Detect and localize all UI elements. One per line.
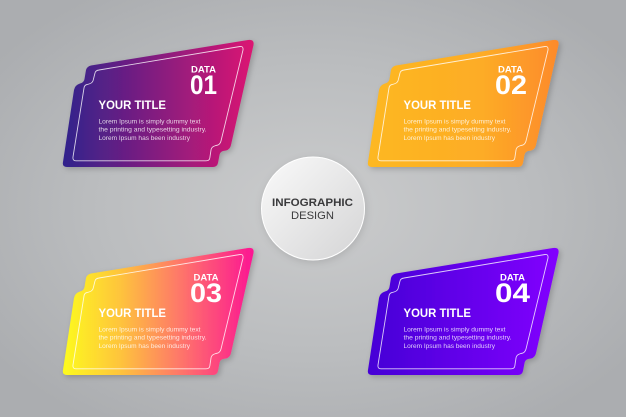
inner outline 03 — [73, 254, 243, 369]
body text 02: Lorem Ipsum has been industry — [404, 136, 495, 142]
body text 03: Lorem Ipsum is simply dummy text — [98, 327, 201, 333]
data label 03: DATA — [194, 272, 219, 282]
data label 01: DATA — [191, 64, 216, 74]
panel: data 02 — [368, 40, 559, 167]
body text 04: Lorem Ipsum has been industry — [404, 344, 495, 350]
panel: data 01 — [63, 40, 254, 167]
inner outline 01 — [73, 46, 243, 161]
number 02: 02 — [495, 70, 527, 100]
number 01: 01 — [190, 70, 217, 100]
body text 03: Lorem Ipsum has been industry — [98, 344, 190, 350]
body text 01: the printing and typesetting industry. — [98, 128, 207, 134]
center circle — [262, 157, 364, 260]
panel: data 04 — [368, 248, 559, 375]
center heading: INFOGRAPHIC — [272, 197, 353, 209]
panel: data 03 — [63, 248, 254, 375]
data label 02: DATA — [498, 64, 523, 74]
body text 01 — [98, 119, 207, 142]
number 04: 04 — [495, 278, 530, 308]
circle disc — [262, 157, 364, 260]
card shape 03 — [63, 248, 254, 375]
card shape 04 — [368, 248, 559, 375]
title 03: YOUR TITLE — [98, 306, 166, 320]
body text 02 — [404, 119, 512, 142]
body text 02: the printing and typesetting industry. — [404, 128, 512, 134]
title 04: YOUR TITLE — [404, 306, 471, 320]
body text 04: Lorem Ipsum is simply dummy text — [404, 327, 506, 333]
inner outline 02 — [378, 46, 548, 161]
body text 01: Lorem Ipsum is simply dummy text — [98, 119, 201, 125]
card shape 02 — [368, 40, 559, 167]
body text 03 — [98, 327, 207, 350]
body text 03: the printing and typesetting industry. — [98, 336, 207, 342]
body text 04 — [404, 327, 512, 350]
title 01: YOUR TITLE — [98, 98, 166, 112]
card shape 01 — [63, 40, 254, 167]
title 02: YOUR TITLE — [404, 98, 471, 112]
number 03: 03 — [190, 278, 222, 308]
inner outline 04 — [378, 254, 548, 369]
body text 04: the printing and typesetting industry. — [404, 336, 512, 342]
data label 04: DATA — [500, 272, 525, 282]
center subheading: DESIGN — [291, 210, 334, 222]
body text 02: Lorem Ipsum is simply dummy text — [404, 119, 506, 125]
body text 01: Lorem Ipsum has been industry — [98, 136, 190, 142]
